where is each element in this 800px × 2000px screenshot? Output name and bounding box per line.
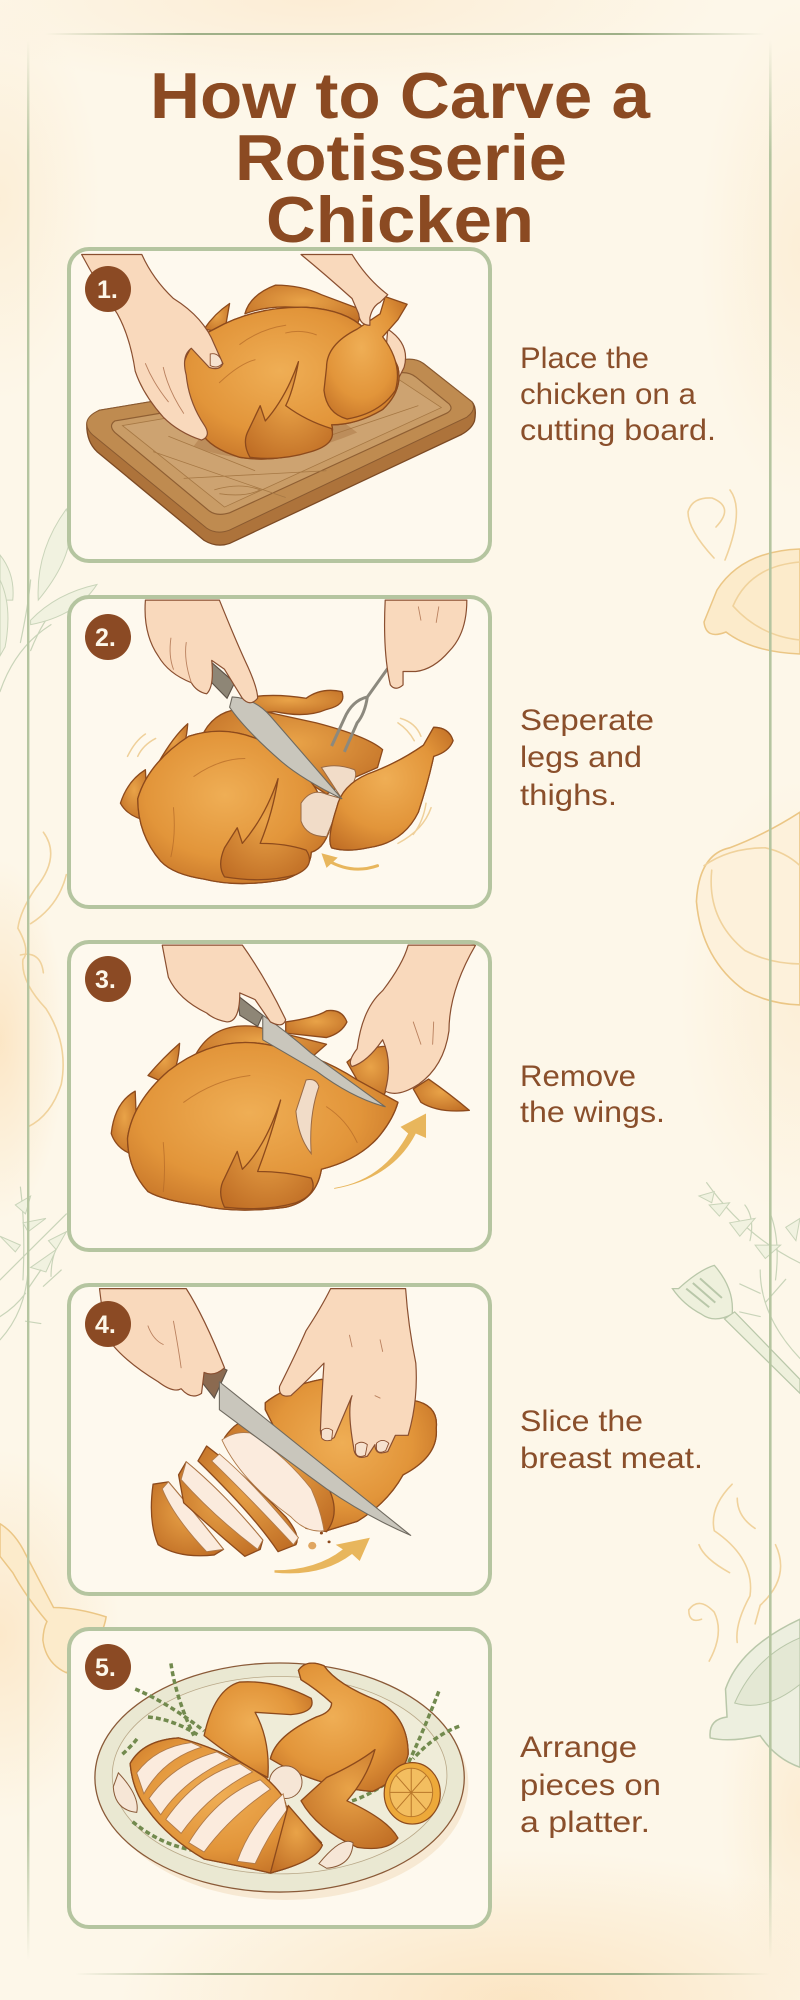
- illustration: separating legs and thighs: [120, 600, 467, 884]
- leaf sprig upper left: [0, 509, 94, 651]
- decorative kitchen sketches: [0, 490, 800, 1767]
- number badge 1: [85, 266, 131, 312]
- card border: [69, 597, 490, 907]
- text: step 3: the wings.: [520, 1096, 665, 1129]
- text: step 5: a platter.: [520, 1806, 650, 1839]
- garlic: [113, 1766, 353, 1868]
- steam swirl upper right: [688, 490, 736, 560]
- number badge 5: [85, 1644, 131, 1690]
- steam left: [18, 832, 63, 1127]
- card border: [69, 1285, 490, 1594]
- card border: [69, 249, 490, 561]
- wooden spoon: [0, 1524, 106, 1673]
- card border: [69, 1629, 490, 1927]
- panel: step 2: [69, 597, 490, 907]
- text: step 3: [520, 1060, 665, 1129]
- number badge 1: 1.: [97, 276, 118, 304]
- herb lower left: [0, 1187, 66, 1280]
- text: step 3: Remove: [520, 1060, 636, 1093]
- text: step 4: breast meat.: [520, 1442, 703, 1475]
- number badge 3: [85, 956, 131, 1002]
- text: step 1: cutting board.: [520, 414, 716, 447]
- text: step 5: Arrange: [520, 1731, 637, 1764]
- text: step 2: [520, 704, 654, 812]
- illustration: hands placing chicken on cutting board: [82, 254, 475, 545]
- herb lower right: [707, 1183, 800, 1280]
- card border: [69, 942, 490, 1250]
- panel: step 4: [69, 1285, 490, 1594]
- title: Chicken: [266, 183, 534, 256]
- number badge 4: [85, 1301, 131, 1347]
- text: step 1: Place the: [520, 342, 649, 375]
- panel: step 3: [69, 942, 490, 1250]
- text: step 2: Seperate: [520, 704, 654, 737]
- text: step 4: Slice the: [520, 1405, 643, 1438]
- text: step 4: [520, 1405, 703, 1475]
- text: step 5: [520, 1731, 661, 1839]
- illustration: removing the wings: [111, 945, 476, 1210]
- text: step 1: [520, 342, 716, 447]
- text: step 5: pieces on: [520, 1769, 661, 1802]
- spatula: [672, 1265, 732, 1319]
- number badge 3: 3.: [95, 966, 116, 994]
- title: [150, 59, 651, 256]
- panel: step 1: [69, 249, 490, 561]
- number badge 4: 4.: [95, 1311, 116, 1339]
- number badge 2: 2.: [95, 624, 116, 652]
- pot lower right: [710, 1619, 800, 1767]
- title: How to Carve a: [150, 59, 651, 132]
- number badge 2: [85, 614, 131, 660]
- text: step 1: chicken on a: [520, 378, 696, 411]
- pot mid right: [696, 812, 800, 1005]
- text: step 2: thighs.: [520, 779, 617, 812]
- illustration: carved chicken on a platter: [95, 1663, 468, 1900]
- pot upper right: [704, 549, 800, 654]
- text: step 2: legs and: [520, 741, 642, 774]
- panel: step 5: [69, 1629, 490, 1927]
- title: Rotisserie: [235, 121, 567, 194]
- steam right: [713, 1484, 751, 1642]
- lemon: [384, 1763, 440, 1824]
- illustration: slicing the breast meat: [99, 1289, 436, 1573]
- number badge 5: 5.: [95, 1654, 116, 1682]
